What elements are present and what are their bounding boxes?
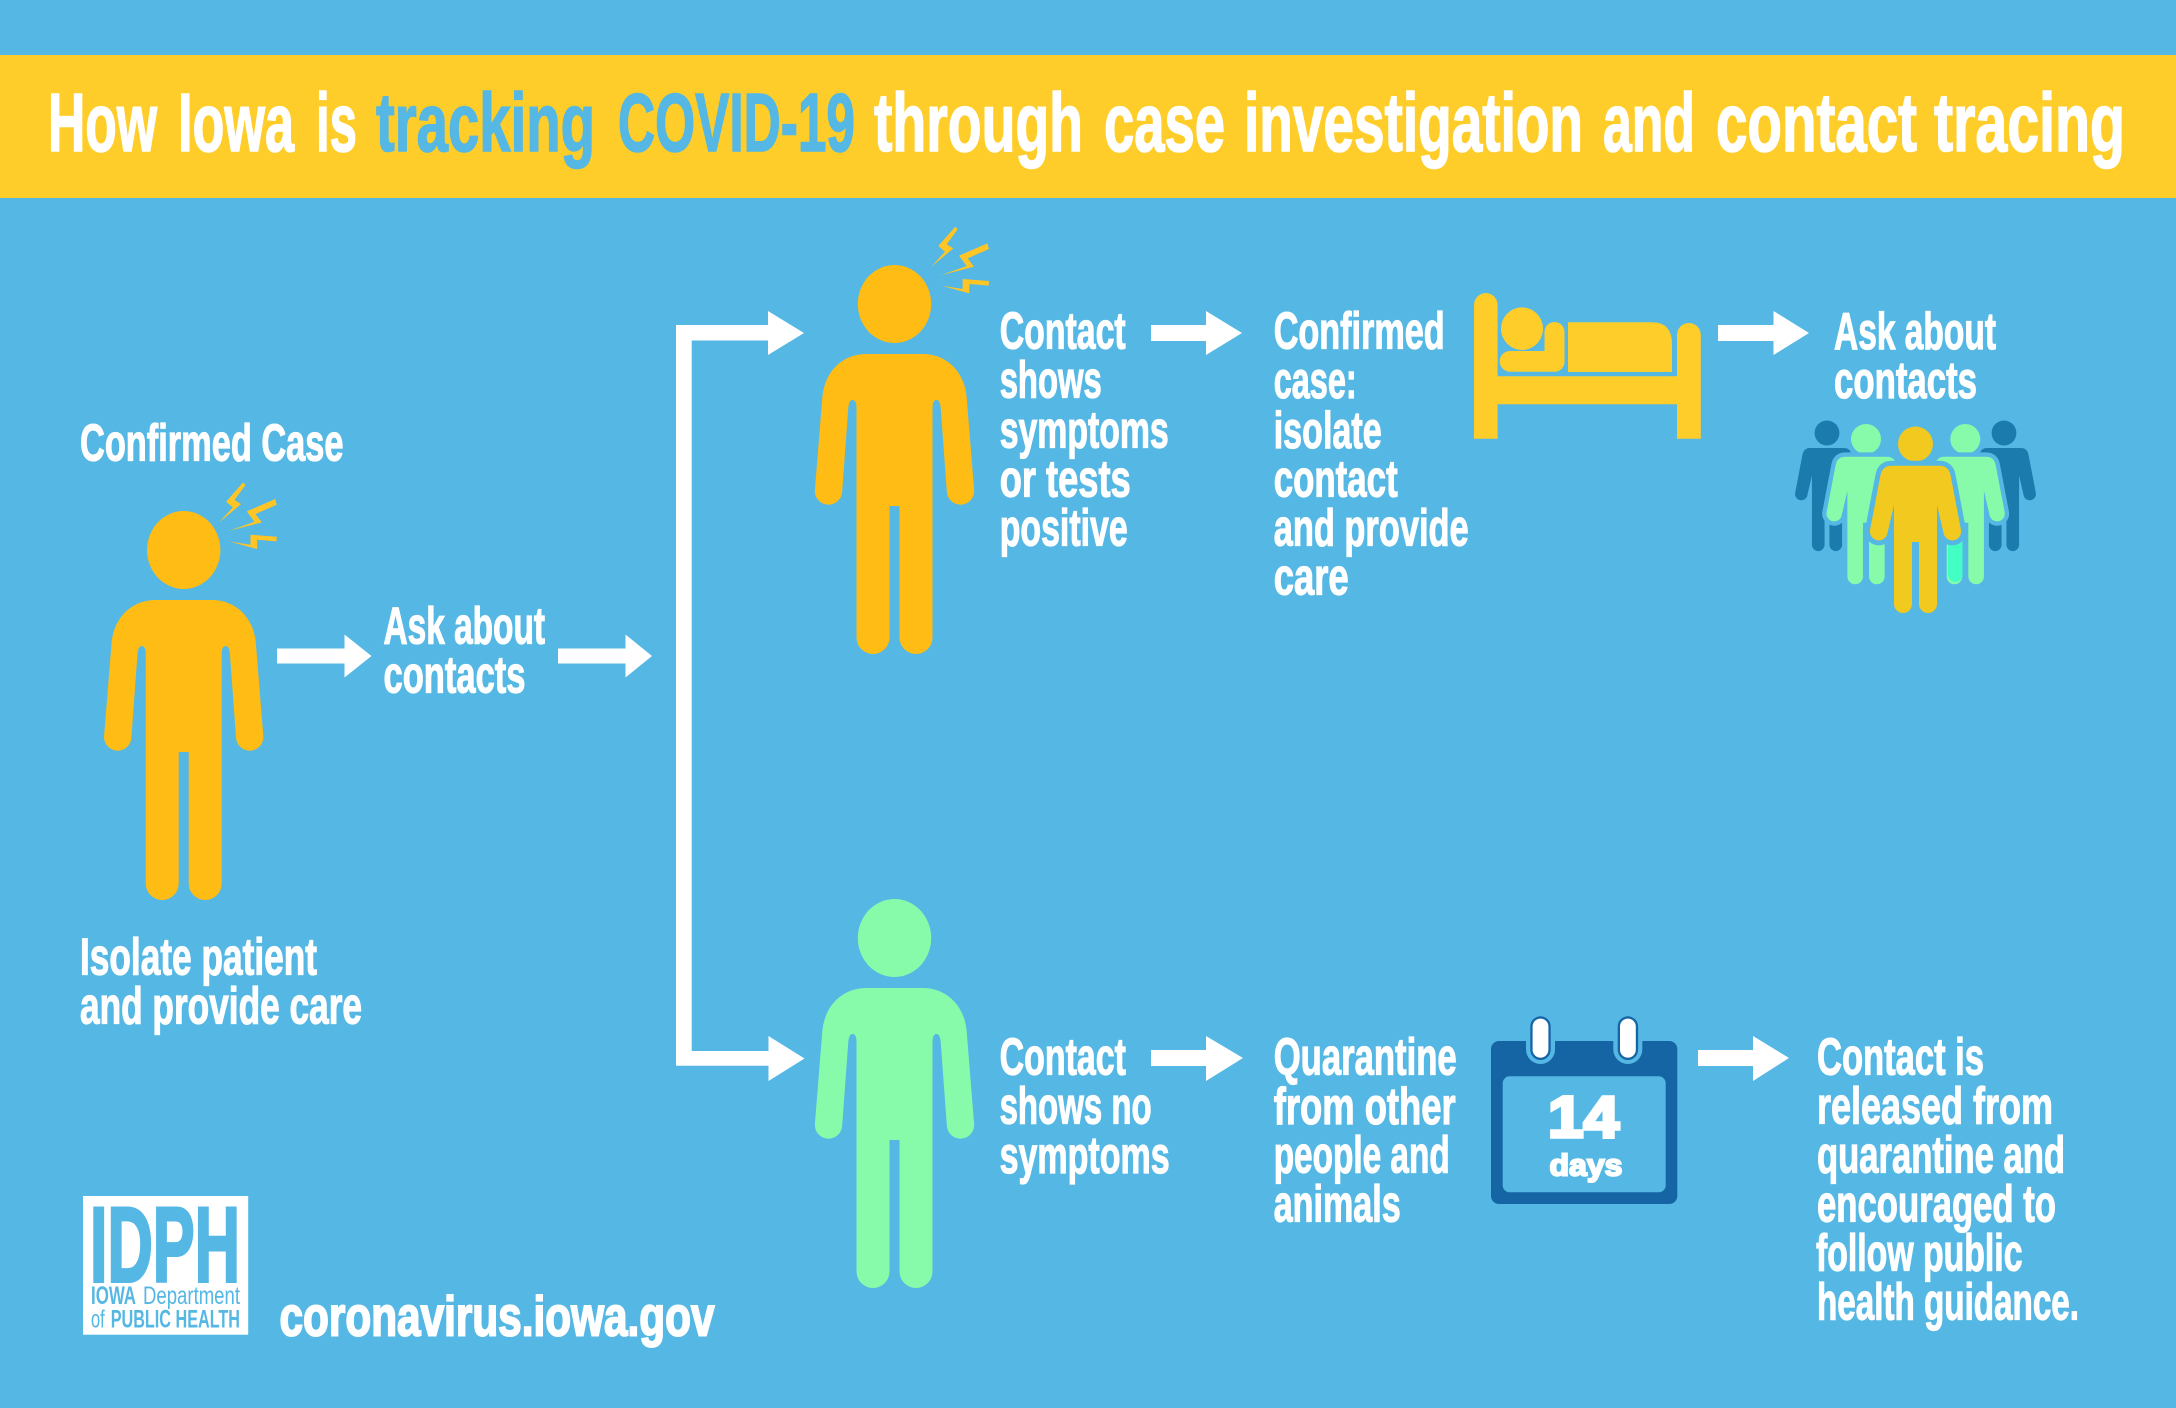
logo: IDPH xyxy=(83,1184,248,1335)
title banner: and xyxy=(1603,76,1695,169)
text: ask about contacts: Ask about xyxy=(384,598,545,656)
icon: asymptomatic contact person xyxy=(815,899,974,1288)
text: confirmed case isolate: Confirmed xyxy=(1274,302,1445,360)
icon: confirmed case person with pain bolts xyxy=(104,482,277,900)
title banner xyxy=(0,55,2176,198)
text: quarantine xyxy=(1274,1028,1457,1234)
text: confirmed case isolate: contact xyxy=(1274,450,1398,508)
text: ask about contacts: contacts xyxy=(384,646,526,704)
text: ask about contacts (second) xyxy=(1834,303,1996,410)
text: contact shows no symptoms: Contact xyxy=(1000,1028,1126,1086)
text: contact is released: follow public xyxy=(1816,1224,2022,1282)
text: confirmed case isolate: care xyxy=(1274,548,1349,606)
text: ask about contacts xyxy=(384,598,545,704)
icon: symptomatic contact person xyxy=(815,227,989,654)
text: contact shows no symptoms: shows no xyxy=(1000,1078,1152,1136)
text: contact shows symptoms: positive xyxy=(1000,500,1128,558)
title banner: Iowa xyxy=(178,76,295,169)
icon: 14 day calendar: 14 xyxy=(1548,1085,1619,1150)
text: contact is released xyxy=(1816,1028,2079,1332)
icon: 14 day calendar xyxy=(1491,1016,1677,1204)
arrow: case to ask about contacts xyxy=(277,634,372,678)
title banner: tracking xyxy=(376,76,595,169)
text: contact shows symptoms xyxy=(1000,302,1169,558)
text: contact is released: released from xyxy=(1817,1078,2053,1136)
text: quarantine: Quarantine xyxy=(1274,1028,1457,1086)
arrow: branching bracket xyxy=(676,311,804,1081)
text: contact shows symptoms: symptoms xyxy=(1000,402,1169,460)
text: quarantine: from other xyxy=(1274,1078,1456,1136)
text: quarantine: animals xyxy=(1274,1176,1401,1234)
arrow: to branch xyxy=(558,634,652,678)
logo: IDPH: PUBLIC HEALTH xyxy=(111,1306,240,1334)
text: confirmed case isolate xyxy=(1274,302,1469,606)
title banner: COVID-19 xyxy=(618,76,855,169)
text: contact shows symptoms: shows xyxy=(1000,352,1102,410)
text: quarantine: people and xyxy=(1274,1126,1450,1184)
text: isolate patient xyxy=(80,928,362,1036)
title banner: through xyxy=(874,76,1083,169)
logo: IDPH: Department xyxy=(143,1282,240,1310)
icon: group of contacts xyxy=(1795,420,2036,613)
text: contact is released: Contact is xyxy=(1817,1028,1984,1086)
logo: IDPH: IOWA xyxy=(91,1282,136,1310)
text: contact is released: encouraged to xyxy=(1817,1176,2056,1234)
heading: confirmed case: Confirmed Case xyxy=(80,414,344,472)
logo: IDPH: of xyxy=(91,1306,105,1334)
title banner: contact xyxy=(1716,76,1917,169)
logo: IDPH: IDPH xyxy=(90,1184,240,1304)
text: contact shows symptoms: or tests xyxy=(1000,450,1131,508)
website url: coronavirus.iowa.gov xyxy=(280,1284,714,1348)
arrow: calendar to release xyxy=(1698,1036,1789,1081)
text: contact shows symptoms: Contact xyxy=(1000,302,1126,360)
icon: patient in bed xyxy=(1474,293,1701,439)
title banner: is xyxy=(316,76,357,169)
arrow: no symptoms to quarantine xyxy=(1151,1036,1243,1081)
arrow: symptoms to confirmed case xyxy=(1151,311,1242,355)
title banner: case xyxy=(1104,76,1225,169)
text: contact shows no symptoms xyxy=(1000,1028,1170,1185)
icon: 14 day calendar: days xyxy=(1550,1148,1622,1182)
arrow: confirmed case to ask about contacts xyxy=(1718,311,1809,355)
text: ask about contacts (second): contacts xyxy=(1834,352,1977,410)
text: confirmed case isolate: and provide xyxy=(1274,500,1469,558)
text: isolate patient: Isolate patient xyxy=(80,928,317,986)
title banner: investigation xyxy=(1244,76,1583,169)
text: contact shows no symptoms: symptoms xyxy=(1000,1127,1170,1185)
text: confirmed case isolate: isolate xyxy=(1274,402,1382,460)
title banner: How xyxy=(48,76,157,169)
text: confirmed case isolate: case: xyxy=(1274,352,1357,410)
text: isolate patient: and provide care xyxy=(80,978,362,1036)
text: ask about contacts (second): Ask about xyxy=(1834,303,1996,361)
